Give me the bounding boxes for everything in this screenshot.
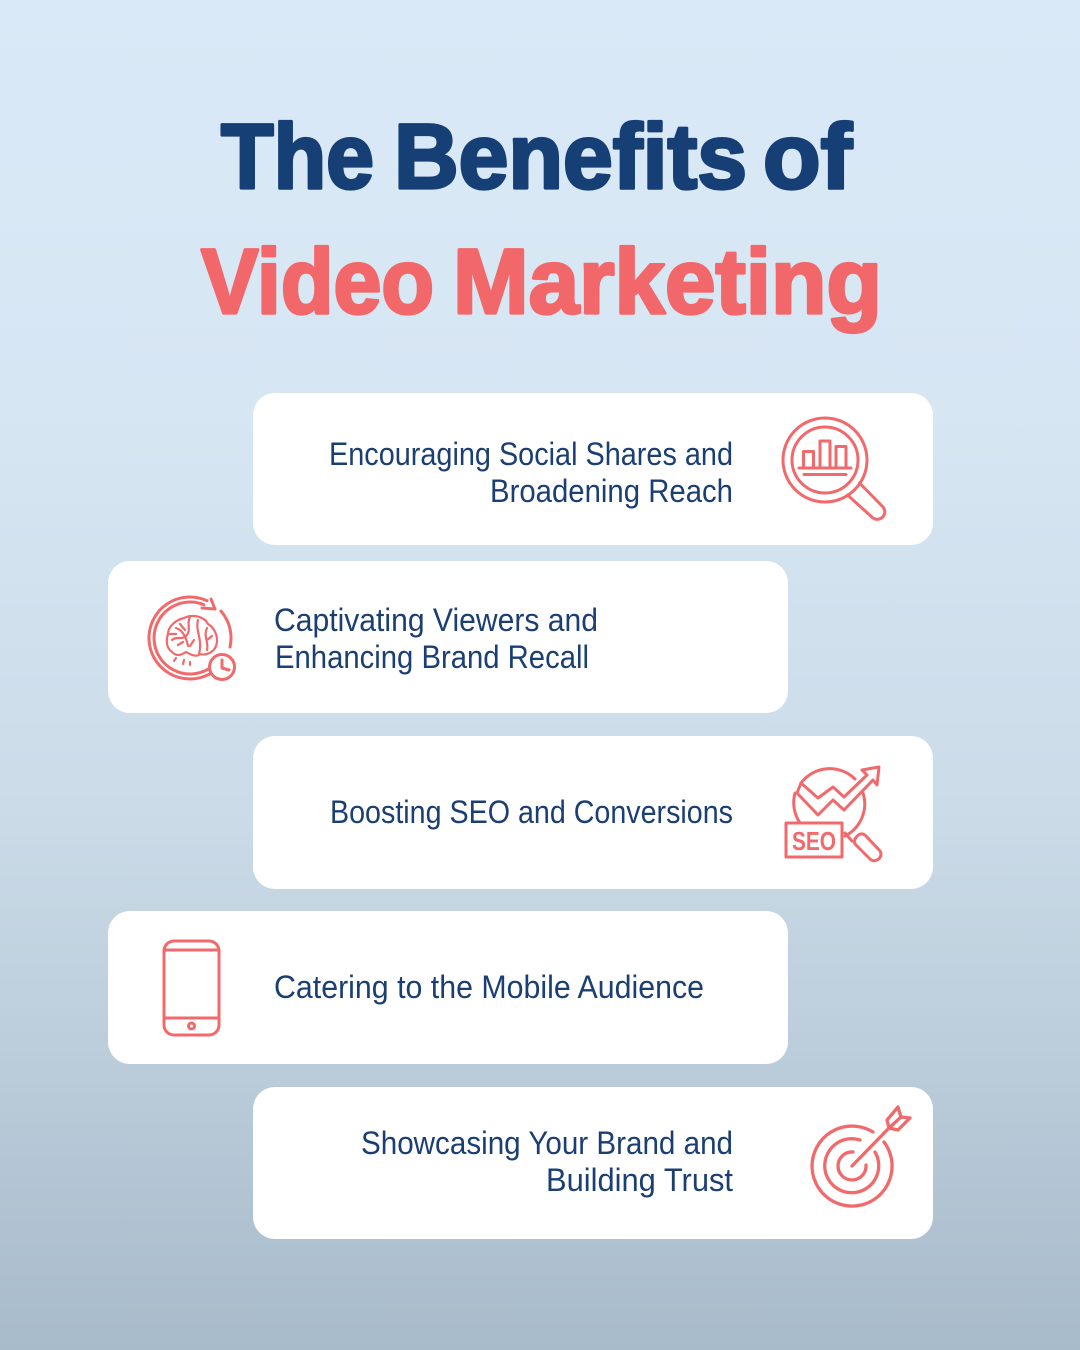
icon: phone bbox=[164, 941, 219, 1035]
text: social shares: Encouraging Social Shares and bbox=[329, 436, 733, 472]
title bbox=[201, 106, 882, 333]
panel: mobile bbox=[108, 911, 788, 1064]
title: of bbox=[763, 106, 852, 208]
title: Benefits bbox=[394, 106, 747, 208]
text: brand recall: Enhancing Brand Recall bbox=[275, 639, 589, 675]
text: social shares: Broadening Reach bbox=[490, 473, 733, 509]
icon: brain with clock bbox=[149, 597, 234, 680]
panel: brand recall bbox=[108, 561, 788, 713]
icon: SEO magnifier bbox=[786, 767, 881, 861]
text: social shares bbox=[329, 436, 733, 509]
title: The bbox=[221, 106, 374, 208]
icon: SEO magnifier: SEO bbox=[792, 826, 836, 856]
title: Video bbox=[201, 231, 434, 333]
panel: SEO bbox=[253, 736, 933, 889]
text: brand recall bbox=[274, 602, 598, 675]
text: trust: Showcasing Your Brand and bbox=[361, 1125, 733, 1161]
text: trust bbox=[361, 1125, 733, 1198]
panel: social shares bbox=[253, 393, 933, 545]
icon: magnifier with bar chart bbox=[783, 418, 885, 519]
text: brand recall: Captivating Viewers and bbox=[274, 602, 598, 638]
icon: target with arrow bbox=[812, 1107, 910, 1206]
text: mobile: Catering to the Mobile Audience bbox=[274, 969, 704, 1005]
text: SEO: Boosting SEO and Conversions bbox=[330, 794, 733, 830]
text: trust: Building Trust bbox=[546, 1162, 733, 1198]
title: Marketing bbox=[453, 231, 882, 333]
panel: trust bbox=[253, 1087, 933, 1239]
